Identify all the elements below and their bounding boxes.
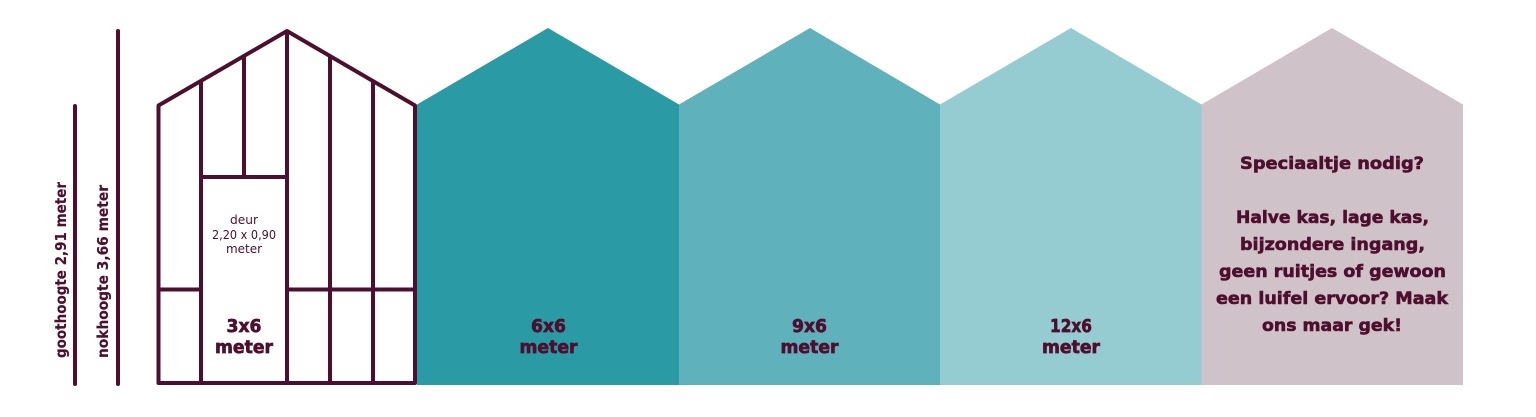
house: 12x6 meter: meter: [1042, 337, 1100, 358]
door label: deur: [230, 212, 259, 227]
house: 12x6 meter: 12x6: [1050, 316, 1092, 337]
callout text: bijzondere ingang,: [1240, 235, 1425, 255]
house: 6x6 meter: meter: [520, 337, 578, 358]
house: 6x6 meter: [417, 28, 679, 385]
size label: 3x6 meter: meter: [215, 337, 273, 358]
house: 9x6 meter: meter: [780, 337, 839, 358]
door label: [212, 212, 276, 256]
house: speciaaltje: [1202, 28, 1463, 385]
callout text: een luifel ervoor? Maak: [1216, 289, 1449, 309]
size label: 3x6 meter: [215, 316, 273, 358]
size label: 3x6 meter: 3x6: [226, 316, 262, 337]
height indicator: goothoogte: goothoogte 2,91 meter: [52, 181, 70, 358]
house: 6x6 meter: 6x6: [531, 316, 566, 337]
door label: 2,20 x 0,90: [212, 227, 276, 242]
callout heading: Speciaaltje nodig?: [1240, 154, 1424, 174]
house: 9x6 meter: [679, 28, 940, 385]
callout text: ons maar gek!: [1262, 316, 1402, 336]
callout text: geen ruitjes of gewoon: [1219, 262, 1446, 282]
house: 9x6 meter: 9x6: [792, 316, 827, 337]
height indicator: nokhoogte: nokhoogte 3,66 meter: [94, 184, 112, 358]
house: 12x6 meter: [940, 28, 1202, 385]
callout text: [1216, 208, 1449, 336]
door label: meter: [226, 241, 263, 256]
house: 3x6 meter frame: [158, 31, 415, 383]
callout text: Halve kas, lage kas,: [1236, 208, 1429, 228]
